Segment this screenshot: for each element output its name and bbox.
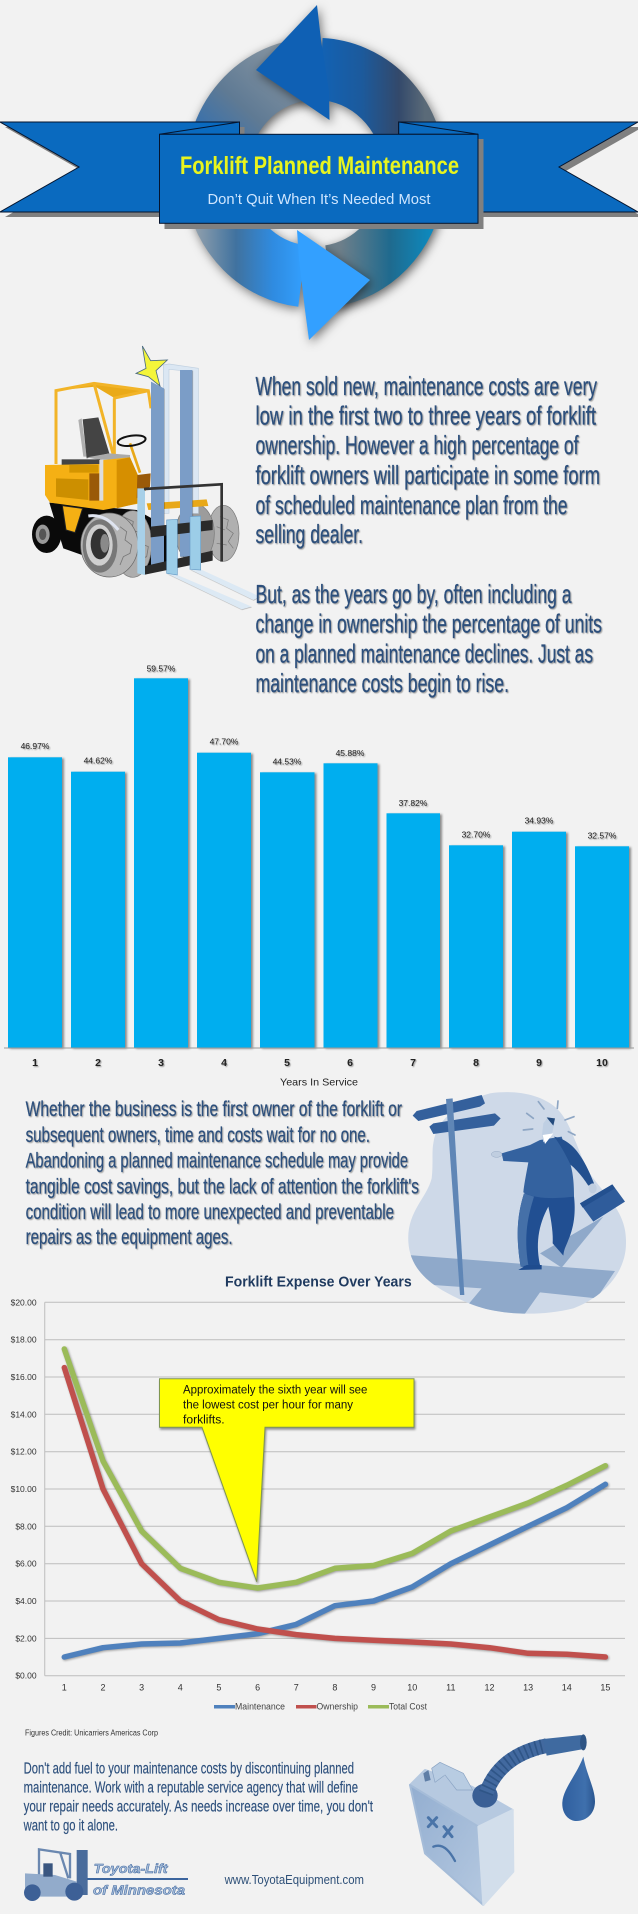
- y axis labels: $12.00: [11, 1447, 37, 1457]
- bar chart: planned maintenance by years in service: [4, 664, 634, 1089]
- text block: intro: selling dealer.: [256, 519, 363, 549]
- x axis labels: 7: [294, 1683, 299, 1693]
- y axis labels: $6.00: [15, 1559, 37, 1569]
- light mast back: [163, 364, 198, 513]
- year labels: [32, 1057, 608, 1069]
- year labels: 3: [158, 1057, 164, 1069]
- line chart: forklift expense over years: [11, 1274, 625, 1712]
- text block: whether the business: condition will lead to more unexpected and preventable: [26, 1201, 394, 1224]
- axis title: Years In Service: [280, 1077, 358, 1089]
- y axis labels: $18.00: [11, 1335, 37, 1345]
- value labels: 47.70%: [210, 737, 239, 747]
- callout: sixth year: Approximately the sixth year will see: [183, 1384, 367, 1396]
- logo forklift: [24, 1849, 88, 1901]
- steering wheel: [117, 434, 146, 473]
- signpost: [413, 1095, 501, 1295]
- value labels: 59.57%: [147, 664, 176, 674]
- legend: Ownership: [316, 1702, 358, 1712]
- x axis labels: 1: [62, 1683, 67, 1693]
- y axis labels: [11, 1297, 37, 1681]
- text block: closing paragraph: [23, 1760, 373, 1835]
- value labels: 32.57%: [588, 830, 617, 840]
- text block: intro: [256, 371, 602, 698]
- logo: Toyota-Lift of Minnesota: of Minnesota: [93, 1882, 185, 1898]
- y axis labels: $0.00: [15, 1671, 37, 1681]
- text block: closing paragraph: your repair needs accurately. As needs increase over time, you don't: [24, 1799, 373, 1816]
- can face: [428, 1818, 455, 1861]
- value labels: 34.93%: [525, 816, 554, 826]
- x axis labels: 4: [178, 1683, 183, 1693]
- year labels: 8: [473, 1057, 479, 1069]
- illustration: fuel can with drop: [410, 1734, 595, 1905]
- logo: Toyota-Lift of Minnesota: [24, 1849, 188, 1901]
- y axis labels: $2.00: [15, 1633, 37, 1643]
- year labels: 2: [95, 1057, 101, 1069]
- x axis labels: 9: [371, 1683, 376, 1693]
- year labels: 1: [32, 1057, 38, 1069]
- confusion burst: [523, 1101, 575, 1135]
- year labels: 6: [347, 1057, 353, 1069]
- text block: whether the business: subsequent owners, time and costs wait for no one.: [26, 1124, 370, 1147]
- year labels: 5: [284, 1057, 290, 1069]
- year labels: 4: [221, 1057, 227, 1069]
- x axis labels: 13: [523, 1683, 533, 1693]
- y axis labels: $14.00: [11, 1409, 37, 1419]
- value labels: 46.97%: [21, 741, 50, 751]
- rear wheel: [32, 516, 61, 553]
- value labels: 37.82%: [399, 798, 428, 808]
- far wheels: [176, 504, 239, 563]
- text block: whether the business: Abandoning a planned maintenance schedule may provide: [26, 1150, 408, 1173]
- x axis labels: 2: [100, 1683, 106, 1693]
- blob background: [408, 1092, 626, 1314]
- overhead guard: [56, 383, 151, 464]
- y axis labels: $4.00: [15, 1596, 37, 1606]
- banner ribbon: [0, 122, 638, 229]
- carriage: [137, 484, 222, 575]
- value labels: 32.70%: [462, 829, 491, 839]
- legend: Total Cost: [389, 1702, 427, 1712]
- icon: star: [136, 346, 167, 386]
- x axis labels: [62, 1683, 610, 1693]
- value labels: 45.88%: [336, 748, 365, 758]
- data lines: [64, 1349, 605, 1657]
- hose and nozzle: [472, 1734, 587, 1808]
- x axis labels: 11: [446, 1683, 455, 1693]
- line: maintenance: [64, 1484, 605, 1657]
- ground: [400, 1217, 615, 1318]
- y axis labels: $16.00: [11, 1372, 37, 1382]
- callout: sixth year: the lowest cost per hour for many: [183, 1399, 353, 1411]
- x axis labels: 14: [562, 1683, 572, 1693]
- forks: [167, 516, 260, 609]
- text block: closing paragraph: Don't add fuel to your maintenance costs by discontinuing planned: [24, 1760, 354, 1777]
- title: Forklift Planned Maintenance: [180, 152, 459, 180]
- chart title: Forklift Expense Over Years: [225, 1274, 412, 1291]
- x axis labels: 10: [407, 1683, 417, 1693]
- line: total cost: [64, 1349, 605, 1588]
- bars: [8, 678, 629, 1048]
- x axis labels: 15: [600, 1683, 610, 1693]
- y axis labels: $20.00: [11, 1297, 37, 1307]
- text block: whether the business: tangible cost savings, but the lack of attention the forklift's: [26, 1175, 419, 1198]
- x axis labels: 3: [139, 1683, 144, 1693]
- subtitle: Don’t Quit When It’s Needed Most: [208, 191, 431, 208]
- year labels: 9: [536, 1057, 542, 1069]
- website url: www.ToyotaEquipment.com: [224, 1872, 364, 1887]
- body: [45, 457, 151, 533]
- x axis labels: 8: [332, 1683, 337, 1693]
- legend: [214, 1702, 427, 1712]
- x axis labels: 6: [255, 1683, 260, 1693]
- illustration: confused businessman at signpost: [400, 1092, 626, 1318]
- seat: [62, 417, 130, 465]
- year labels: 7: [410, 1057, 416, 1069]
- text block: closing paragraph: maintenance. Work with a reputable service agency that will define: [24, 1780, 358, 1797]
- x axis labels: 5: [216, 1683, 221, 1693]
- illustration: yellow forklift: [32, 346, 260, 609]
- value labels: [21, 664, 617, 840]
- y axis labels: $8.00: [15, 1521, 37, 1531]
- text block: intro: maintenance costs begin to rise.: [256, 668, 509, 698]
- icon: fuel drop: [562, 1757, 595, 1821]
- mast rails: [151, 370, 192, 570]
- x axis labels: 12: [484, 1683, 495, 1693]
- text block: whether the business: repairs as the equipment ages.: [26, 1226, 233, 1249]
- grid lines: [45, 1302, 625, 1676]
- chassis: [49, 503, 167, 570]
- logo: Toyota-Lift of Minnesota: Toyota-Lift: [94, 1861, 168, 1876]
- callout: sixth year: [160, 1379, 414, 1582]
- credit line: Figures Credit: Unicarriers Americas Corp: [25, 1729, 158, 1738]
- businessman: [491, 1117, 625, 1270]
- jacket: [502, 1137, 574, 1198]
- legend: Maintenance: [235, 1702, 285, 1712]
- year labels: 10: [596, 1057, 608, 1069]
- value labels: 44.53%: [273, 756, 302, 766]
- text block: closing paragraph: want to go it alone.: [23, 1818, 118, 1835]
- text block: whether the business: Whether the business is the first owner of the forklift or: [26, 1098, 402, 1121]
- icon: circular arrows: [200, 5, 428, 340]
- line: ownership: [64, 1368, 605, 1657]
- front wheel: [81, 511, 152, 577]
- text block: whether the business: [26, 1098, 419, 1249]
- callout: sixth year: forklifts.: [183, 1414, 225, 1426]
- y axis labels: $10.00: [11, 1484, 37, 1494]
- can: [410, 1762, 513, 1905]
- value labels: 44.62%: [84, 756, 113, 766]
- legs: [518, 1192, 575, 1268]
